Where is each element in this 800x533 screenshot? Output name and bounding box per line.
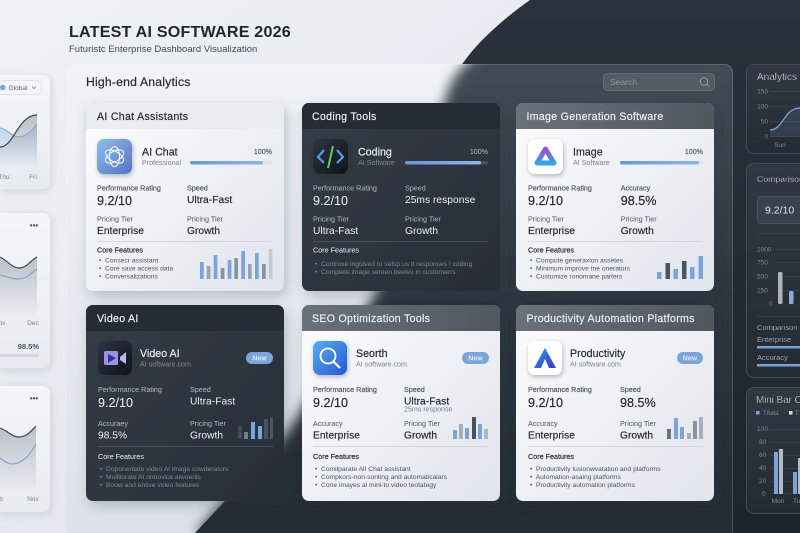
metrics: 9.2/10	[97, 194, 132, 208]
grouped bars: 80	[759, 439, 767, 446]
metrics: Speed	[404, 385, 425, 394]
metrics: Performance Rating	[528, 385, 592, 394]
metrics: 98.5%	[621, 194, 656, 208]
mini bar chart	[667, 417, 703, 439]
card: AI Chat Assistants: Professional	[142, 159, 181, 167]
metrics: 9.2/10	[528, 194, 563, 208]
metrics: Pricing Tier	[404, 419, 441, 428]
area chart	[0, 115, 37, 181]
card: SEO Optimization Tools	[302, 305, 500, 501]
card: Image Generation Software	[516, 103, 714, 291]
bar chart: 1000	[757, 246, 772, 254]
metrics: 98.5%	[98, 430, 127, 442]
mini bar chart	[238, 417, 273, 439]
metrics: Pricing Tier	[405, 214, 442, 224]
value and bar	[0, 342, 39, 357]
right panel: mini bar chart	[746, 388, 800, 514]
metrics: Growth	[405, 226, 438, 237]
metrics: Growth	[621, 226, 654, 237]
left panel: global chart	[0, 75, 50, 189]
icon: letter A logo	[528, 341, 562, 375]
metrics: Accuraey	[98, 419, 128, 428]
card header	[86, 305, 284, 331]
area chart: Nov	[27, 496, 40, 503]
metrics: Growth	[404, 430, 437, 442]
line chart: Sun	[774, 142, 786, 149]
line chart	[757, 88, 800, 149]
metrics: Ultra-Fast	[187, 195, 232, 206]
metrics: Pricing Tier	[620, 419, 657, 428]
metrics	[528, 385, 657, 442]
metrics	[528, 184, 657, 237]
metrics: Pricing Tier	[187, 214, 224, 224]
line chart: 100	[757, 104, 768, 110]
comparison bars: Comparison	[757, 323, 797, 332]
bar chart: 750	[757, 260, 768, 266]
grouped bars: 60	[759, 452, 767, 459]
badge: new	[246, 352, 273, 364]
badge: new	[462, 352, 489, 364]
product name: Image	[573, 146, 603, 158]
progress bar	[620, 148, 704, 164]
metrics: Accuracy	[621, 184, 651, 192]
metrics: Pricing Tier	[528, 214, 565, 224]
core features	[313, 452, 448, 489]
core features: • Core save access data	[99, 266, 173, 272]
mini bar chart	[453, 417, 488, 439]
panel heading: High-end Analytics	[86, 75, 191, 89]
legend	[756, 411, 799, 417]
metrics	[313, 184, 476, 237]
card header: Image Generation Software	[526, 111, 664, 123]
icon: magnifier	[313, 341, 347, 375]
core features: • Cone imayes al mini-to video teotategy	[315, 482, 437, 489]
main glass panel	[185, 64, 733, 533]
card header	[516, 103, 714, 129]
metrics: Enterprise	[313, 430, 360, 442]
product name: Seorth	[356, 348, 388, 360]
core features	[97, 246, 173, 280]
search box: Search	[610, 77, 637, 87]
card: AI Chat Assistants	[86, 103, 284, 291]
icon: triangle logo	[528, 139, 563, 174]
left panel: lower chart	[0, 386, 50, 512]
badge: new: New	[683, 356, 698, 362]
grouped bars: 20	[759, 478, 767, 485]
area chart: Dec	[27, 320, 40, 327]
card header	[516, 305, 714, 331]
line chart: 50	[761, 118, 768, 126]
progress bar: 100%	[254, 148, 273, 156]
core features: • Boow and entive video features	[100, 482, 200, 489]
badge: new: New	[252, 356, 267, 362]
metrics: Speed	[190, 385, 211, 394]
core features: • Minimum improve tne onerators	[530, 266, 631, 272]
metrics: Pricing Tier	[190, 419, 227, 428]
card: Coding Tools	[302, 103, 500, 291]
metrics: Speed	[620, 385, 641, 394]
metrics: Enterprise	[528, 226, 575, 237]
right panel: comparison	[746, 164, 800, 378]
core features	[528, 246, 631, 280]
core features: Core Features	[528, 452, 574, 461]
metrics: Ultra-Fast	[313, 226, 358, 237]
core features: • Productivity lusionwvatation and platforms	[530, 466, 661, 473]
metrics: Pricing Tier	[313, 214, 350, 224]
metrics: Growth	[187, 226, 220, 237]
product name: Coding	[358, 146, 392, 158]
mini bar chart	[657, 256, 703, 279]
card header	[86, 103, 284, 129]
metrics: Pricing Tier	[97, 214, 134, 224]
right panel: analytics	[746, 64, 800, 154]
metrics: Enterprise	[97, 226, 144, 237]
metrics: 25ms response	[405, 195, 476, 206]
subtitle: Futuristc Enterprise Dashboard Visualization	[69, 43, 257, 54]
value box	[758, 196, 800, 224]
badge: new	[677, 352, 703, 364]
metrics: Speed	[187, 184, 208, 192]
metrics: Performance Rating	[313, 385, 377, 394]
metrics: 25ms response	[404, 406, 453, 414]
core features: • Complete image sereen beeivo in customerrs	[315, 269, 456, 276]
progress bar: 100%	[470, 148, 489, 156]
card header: Coding Tools	[312, 111, 377, 123]
right panel: analytics: Analytics	[757, 72, 797, 83]
metrics: 9.2/10	[528, 396, 563, 410]
core features: • Compute generaxion assetes	[530, 258, 624, 264]
metrics	[97, 184, 232, 237]
card header	[302, 305, 500, 331]
metrics: 9.2/10	[313, 396, 348, 410]
metrics: Ultra-Fast	[404, 396, 449, 408]
area chart	[0, 257, 40, 327]
title: LATEST AI SOFTWARE 2026	[69, 23, 291, 41]
metrics: Growth	[620, 430, 653, 442]
grouped bars	[757, 426, 800, 505]
metrics: Performance Rating	[313, 184, 377, 192]
card: Productivity Automation Platforms	[516, 305, 714, 501]
comparison bars	[757, 323, 800, 366]
metrics: Pricing Tier	[621, 214, 657, 224]
icon: video camera	[98, 341, 132, 375]
core features: Core Features	[313, 452, 359, 461]
card: SEO Optimization Tools: AI software.com	[356, 360, 407, 368]
bar chart	[757, 246, 800, 308]
line chart: 0	[764, 134, 768, 140]
metrics: 98.5%	[620, 396, 656, 410]
line chart: 150	[757, 88, 768, 96]
product name: AI Chat	[142, 146, 178, 158]
metrics: Enterprise	[528, 430, 575, 442]
legend: T	[795, 411, 799, 417]
grouped bars: 100	[757, 426, 768, 433]
core features: • Consecr assistant	[99, 258, 158, 264]
core features: • Customize ronomane parters	[530, 274, 623, 280]
card header: Productivity Automation Platforms	[526, 313, 695, 325]
comparison bars: Accuracy	[757, 353, 788, 362]
core features: • Controxe ingolved to setsp us tl responses ! coding	[315, 261, 473, 268]
bar chart: 250	[757, 288, 768, 294]
metrics: Ultra-Fast	[190, 396, 235, 408]
card: Productivity Automation Platforms: AI software.com	[570, 360, 621, 368]
core features: Core Features	[98, 452, 144, 461]
metrics	[98, 385, 235, 442]
product name: Video AI	[140, 348, 180, 360]
card: Image Generation Software: AI Software	[573, 159, 610, 167]
grouped bars: 0	[762, 491, 766, 498]
metrics: Accuracy	[313, 419, 343, 428]
search box	[604, 74, 714, 90]
left panel: monthly chart	[0, 213, 50, 368]
core features	[313, 246, 473, 276]
card: Video AI: AI software.com	[140, 360, 191, 368]
metrics: Speed	[405, 184, 426, 192]
menu dots: •••	[30, 221, 38, 230]
card: Coding Tools: AI Software	[358, 159, 395, 167]
area chart	[0, 426, 40, 503]
card header: Video AI	[97, 313, 139, 325]
core features: • Moliliorate AI onoovica aiwoerils	[100, 474, 201, 481]
badge: new: New	[468, 356, 483, 362]
core features: • Productivity automation platforms	[530, 482, 636, 489]
bar chart: 500	[757, 274, 768, 280]
card: Video AI	[86, 305, 284, 501]
core features: Core Features	[528, 246, 574, 254]
metrics: Accuracy	[528, 419, 558, 428]
metrics: Performance Rating	[98, 385, 162, 394]
menu dots: •••	[30, 394, 38, 403]
core features	[528, 452, 661, 489]
value box: 9.2/10	[765, 204, 794, 216]
card header: SEO Optimization Tools	[312, 313, 430, 325]
metrics: Performance Rating	[528, 184, 592, 192]
core features: • Conversalizations	[99, 274, 158, 280]
metrics: Growth	[190, 430, 223, 442]
progress bar	[190, 148, 273, 164]
metrics: Performance Rating	[97, 184, 161, 192]
bar chart: 0	[769, 301, 773, 308]
core features: Core Features	[97, 246, 143, 254]
grouped bars: 40	[759, 465, 767, 472]
core features: • Comilparate AlI Chat assistant	[315, 466, 411, 473]
progress bar: 100%	[685, 148, 704, 156]
grouped bars: Mon	[772, 498, 785, 505]
metrics: 9.2/10	[313, 194, 348, 208]
card header	[302, 103, 500, 129]
comparison bars: Enterprise	[757, 335, 791, 344]
area chart: Fri	[29, 174, 37, 181]
metrics: 9.2/10	[98, 396, 133, 410]
card header: AI Chat Assistants	[97, 111, 188, 123]
icon: chat knot	[97, 139, 132, 174]
metrics	[313, 385, 453, 442]
icon: code brackets	[313, 139, 348, 174]
core features	[98, 452, 229, 489]
core features: • Automation-asaing platforms	[530, 474, 621, 481]
core features: • Compkors-non-sonting and automaticalars	[315, 474, 448, 481]
legend: T6ata	[763, 411, 779, 417]
region selector: Global	[8, 85, 28, 92]
value and bar: 98.5%	[18, 342, 39, 351]
mini bar chart	[200, 249, 272, 279]
product name: Productivity	[570, 348, 626, 360]
core features: Core Features	[313, 246, 359, 254]
progress bar	[405, 148, 489, 164]
core features: • Doponentate video AI image cowderators	[100, 466, 229, 473]
